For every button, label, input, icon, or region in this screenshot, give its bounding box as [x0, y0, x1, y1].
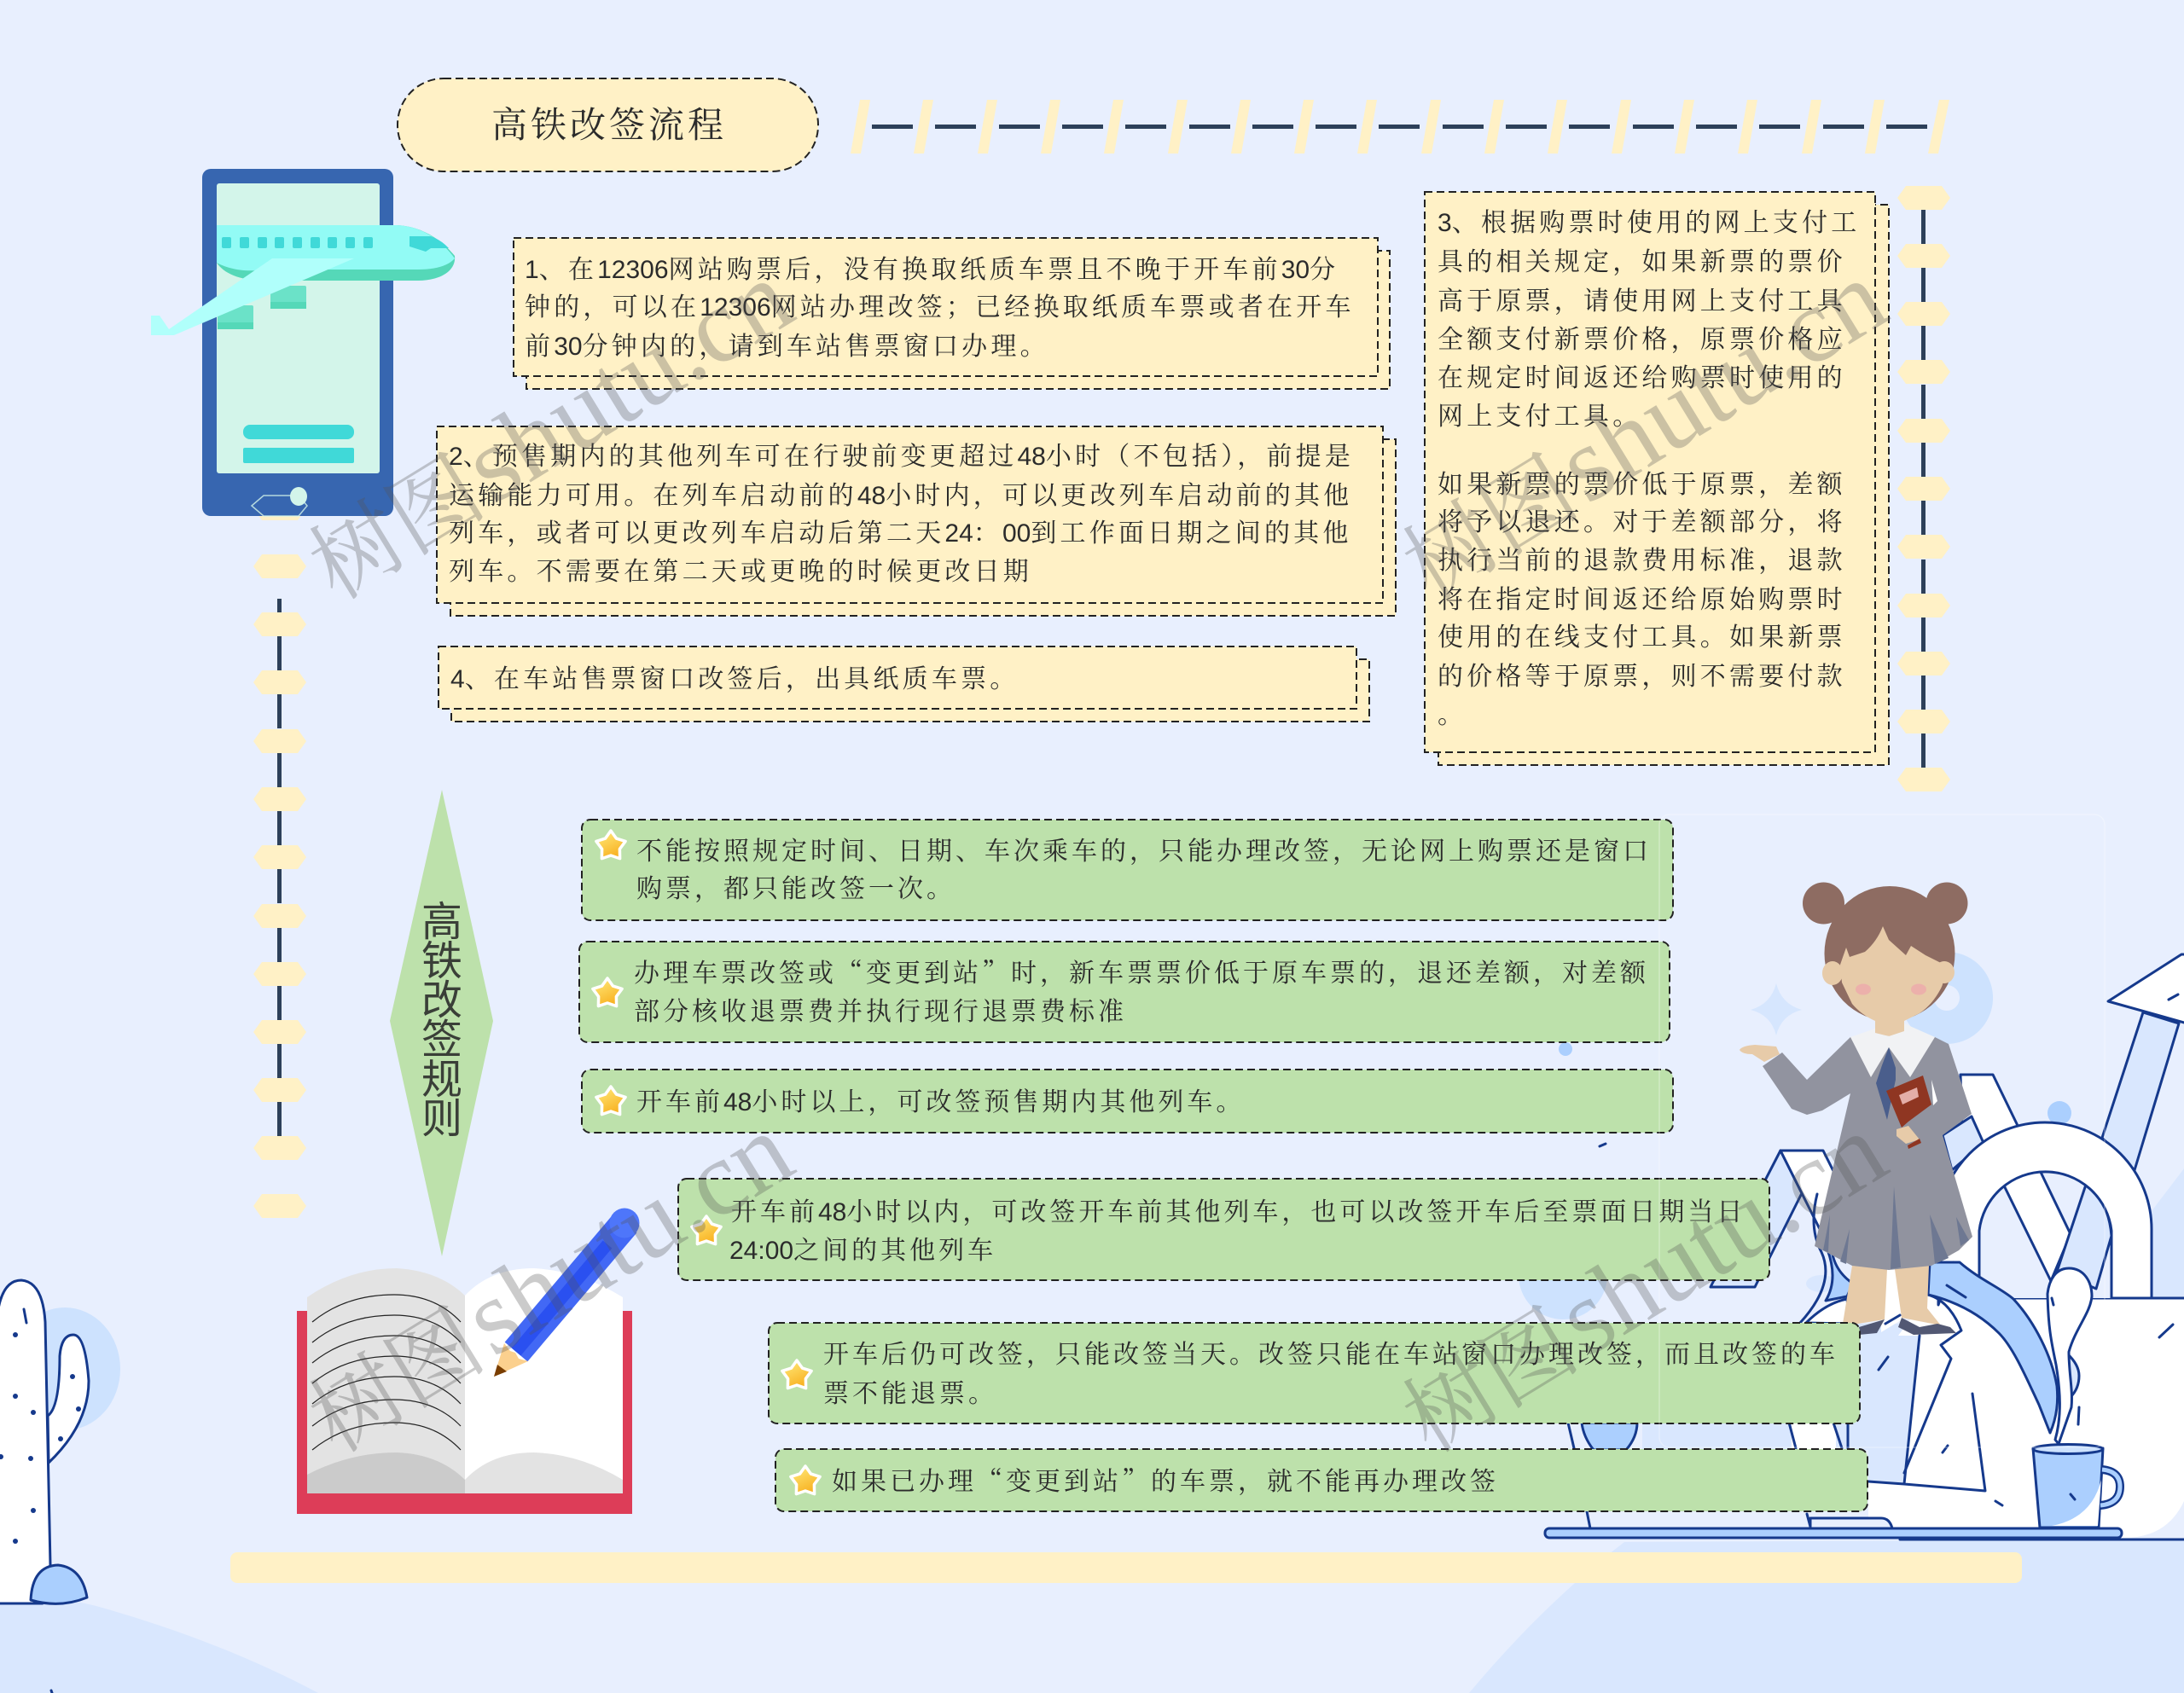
- rule 3: 开车前48小时以上，可改签预售期内其他列车。: [636, 1088, 1245, 1116]
- panel: step 3: 3、根据购票时使用的网上支付工: [1438, 209, 1860, 237]
- right bead column: [1897, 186, 1950, 791]
- plane fuselage: [217, 225, 455, 281]
- rule 3: [582, 1070, 1673, 1133]
- right light fill: [2152, 1168, 2184, 1301]
- plane windows: [222, 236, 449, 252]
- phone screen: [217, 183, 380, 473]
- left page: [307, 1268, 465, 1493]
- panel: step 3: 具的相关规定，如果新票的票价: [1438, 248, 1846, 276]
- panel: step 2: [437, 426, 1396, 616]
- sparkle: [1751, 983, 1802, 1035]
- white teapot mass: [1868, 1295, 2184, 1538]
- home button: [252, 487, 307, 516]
- rule 2: [579, 942, 1670, 1042]
- blue ring behind head: [1901, 952, 1993, 1044]
- watermark 2: 树图shutu.cn: [1381, 238, 1905, 622]
- panel: step 3: 如果新票的票价低于原票，差额: [1438, 471, 1846, 499]
- diamond heading: rules: 高: [421, 900, 462, 945]
- left legs of teapot: [1806, 1275, 1837, 1292]
- diamond heading: rules: 则: [421, 1097, 462, 1142]
- phone body: [202, 169, 393, 516]
- rule 2: 办理车票改签或“变更到站”时，新车票票价低于原车票的，退还差额，对差额: [634, 952, 1649, 989]
- panel: step 3: 将在指定时间返还给原始购票时: [1438, 586, 1846, 614]
- illustration: open book with pencil: [297, 1208, 640, 1514]
- diamond heading: rules: [390, 790, 493, 1256]
- left teapot base: [1582, 1423, 1637, 1450]
- panel: step 1: 钟的，可以在12306网站办理改签；已经换取纸质车票或者在开车: [525, 293, 1355, 322]
- book cover: [297, 1311, 632, 1514]
- panel: step 4: [439, 646, 1369, 722]
- panel: step 2: 列车。不需要在第二天或更晚的时候更改日期: [449, 558, 1032, 586]
- rule 4: 24:00之间的其他列车: [729, 1237, 996, 1265]
- panel: step 1: 前30分钟内的，请到车站售票窗口办理。: [525, 333, 1049, 361]
- panel: step 4: 4、在车站售票窗口改签后，出具纸质车票。: [450, 665, 1019, 693]
- rule 1: 不能按照规定时间、日期、车次乘车的，只能办理改签，无论网上购票还是窗口: [636, 838, 1652, 866]
- right page: [465, 1268, 623, 1493]
- panel: step 3: 高于原票，请使用网上支付工具: [1438, 287, 1846, 316]
- plane wing and tail: [151, 258, 354, 335]
- bottom yellow bar: [230, 1552, 2022, 1583]
- panel: step 3: 的价格等于原票，则不需要付款: [1438, 663, 1846, 691]
- panel: step 3: [1425, 192, 1889, 765]
- diamond heading: rules: 签: [421, 1018, 462, 1063]
- zigzag left: [1711, 1151, 1802, 1287]
- zigzag right: [1960, 1075, 2022, 1151]
- collar curve: [1904, 1295, 1961, 1473]
- blue curved band: [1928, 1262, 2058, 1433]
- panel: step 3: 。: [1438, 701, 1467, 729]
- hidden bead under phone: [253, 496, 306, 520]
- panel: step 2: 2、预售期内的其他列车可在行驶前变更超过48小时（不包括），前提是: [449, 443, 1354, 471]
- rule 5: 开车后仍可改签，只能改签当天。改签只能在车站窗口办理改签，而且改签的车: [823, 1341, 1838, 1369]
- panel: step 3: 使用的在线支付工具。如果新票: [1438, 623, 1846, 652]
- rule 5: 票不能退票。: [823, 1380, 997, 1408]
- background hill: bottom left: [0, 1598, 318, 1693]
- panel: step 1: [514, 238, 1390, 389]
- wheel window: [1979, 1172, 2111, 1298]
- diamond heading: rules: 铁: [421, 939, 462, 984]
- panel: step 3: 执行当前的退款费用标准，退款: [1438, 547, 1846, 575]
- rule 6: [775, 1449, 1867, 1511]
- page lines: [312, 1295, 461, 1450]
- pencil: [494, 1208, 640, 1377]
- small dots: [1559, 1042, 1572, 1056]
- lapel lines: [1868, 1336, 1985, 1491]
- background hill: bottom right: [1469, 1539, 2184, 1693]
- decorative dashed rule with slashes: [851, 100, 1949, 154]
- left bead column: [253, 554, 306, 1218]
- faint frame over the rule boxes: [1659, 815, 2105, 1447]
- rule 2: 部分核收退票费并执行现行退票费标准: [634, 998, 1127, 1026]
- panel: step 2: 列车，或者可以更改列车启动后第二天24：00到工作面日期之间的其他: [449, 519, 1352, 548]
- diamond heading: rules: 改: [421, 978, 462, 1023]
- watermark 3: 树图shutu.cn: [288, 1091, 811, 1475]
- lower light-blue areas: [1642, 1324, 1924, 1488]
- phone bars: [243, 425, 354, 439]
- rule 6: 如果已办理“变更到站”的车票，就不能再办理改签: [832, 1460, 1499, 1498]
- illustration: girl presenter: [1740, 882, 1972, 1335]
- arrow: [2102, 1012, 2179, 1170]
- rule 4: [678, 1179, 1769, 1280]
- panel: step 3: 全额支付新票价格，原票价格应: [1438, 326, 1846, 354]
- diamond heading: rules: 规: [421, 1058, 462, 1103]
- engines: [218, 305, 253, 329]
- rule 1: [582, 820, 1673, 920]
- white gap under box five: [1792, 1416, 1836, 1450]
- title pill: 高铁改签流程: [491, 106, 727, 146]
- arch ring: [1938, 1122, 2152, 1305]
- rule 4: 开车前48小时以内，可改签开车前其他列车，也可以改签开车后至票面日期当日: [731, 1198, 1745, 1226]
- illustration: teapot, arch and arrow backdrop: [1519, 952, 2184, 1539]
- panel: step 1: 1、在12306网站购票后，没有换取纸质车票且不晚于开车前30分: [525, 256, 1339, 284]
- cup: [2033, 1448, 2103, 1528]
- panel: step 3: 在规定时间返还给购票时使用的: [1438, 364, 1846, 392]
- watermark 4: 树图shutu.cn: [1381, 1091, 1905, 1475]
- table: [1545, 1528, 2122, 1538]
- illustration: phone with plane: [151, 169, 455, 520]
- panel: step 3: 网上支付工具。: [1438, 403, 1641, 431]
- title pill: [398, 78, 818, 171]
- watermark 1: 树图shutu.cn: [288, 238, 811, 622]
- panel: step 2: 运输能力可用。在列车启动前的48小时内，可以更改列车启动前的其他: [449, 482, 1352, 510]
- water drop: [2067, 1354, 2079, 1397]
- rule 1: 购票，都只能改签一次。: [636, 875, 956, 903]
- illustration: cactus: [0, 1280, 120, 1693]
- panel: step 3: 将予以退还。对于差额部分，将: [1438, 508, 1846, 536]
- rule 5: [769, 1323, 1860, 1423]
